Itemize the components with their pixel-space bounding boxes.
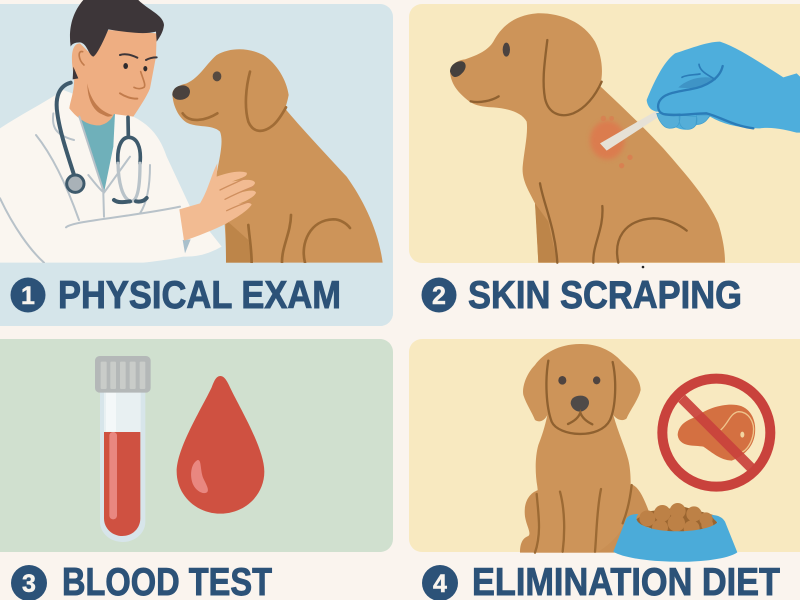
stethoscope <box>57 83 147 202</box>
icon: food bowl with kibble <box>613 503 737 562</box>
number badge 1 <box>10 278 46 312</box>
icon: blood drop <box>177 376 264 514</box>
illustration: sitting dog <box>520 344 648 553</box>
icon: no meat sign <box>662 379 770 487</box>
heading: skin scraping: SKIN SCRAPING <box>468 274 742 317</box>
illustration: dog being examined <box>172 49 383 263</box>
number badge 4 <box>422 565 458 600</box>
icon: blood test tube <box>95 356 151 542</box>
speck <box>642 266 644 268</box>
number badge 3: 3 <box>22 570 36 598</box>
panel: blood test <box>0 339 393 600</box>
number badge 2 <box>422 278 456 312</box>
vet hand <box>179 163 256 241</box>
number badge 3 <box>11 565 47 600</box>
irritated skin patch <box>590 116 633 168</box>
number badge 4: 4 <box>433 570 447 598</box>
number badge 2: 2 <box>432 282 446 310</box>
number badge 1: 1 <box>21 282 35 310</box>
heading: physical exam: PHYSICAL EXAM <box>58 274 341 317</box>
gloved hand <box>647 42 800 133</box>
illustration: dog with skin patch <box>450 13 800 263</box>
scraping tool <box>600 111 660 151</box>
panel: physical exam <box>0 0 393 326</box>
meat <box>678 405 755 461</box>
panel: skin scraping <box>409 4 800 317</box>
illustration: veterinarian <box>0 0 256 263</box>
panel: elimination diet <box>409 339 800 600</box>
